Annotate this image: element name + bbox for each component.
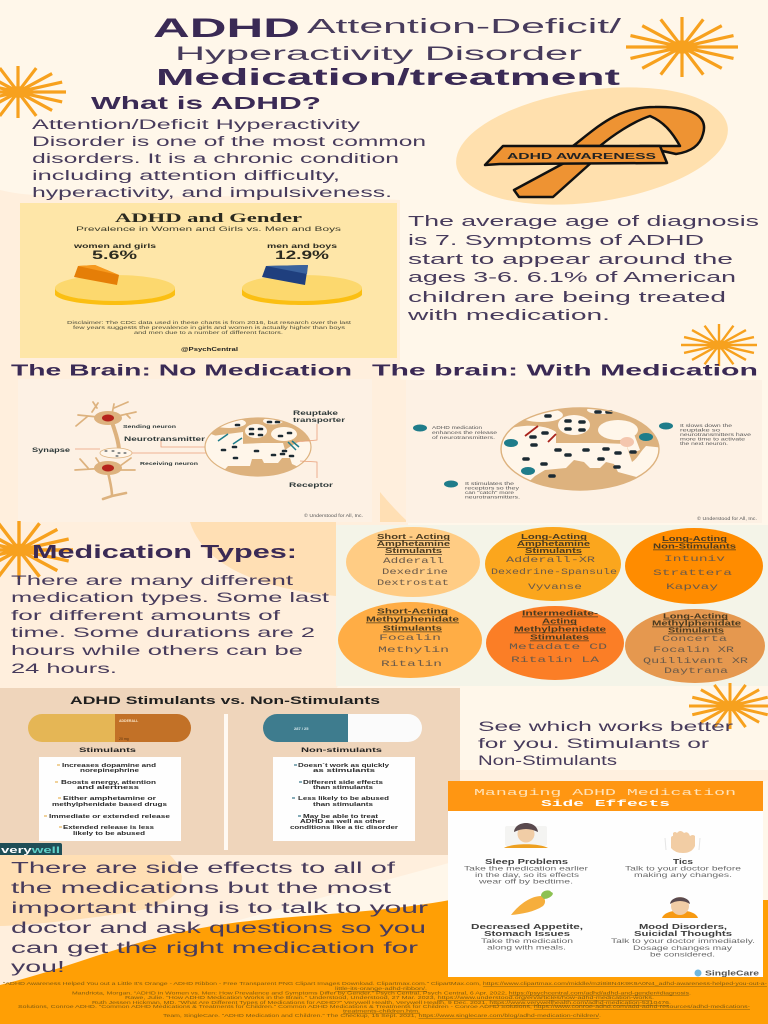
step 2 xyxy=(444,467,535,500)
circle: long-acting methylphenidate: Focalin XR xyxy=(653,645,734,655)
side effect: mood disorders: Suicidal Thoughts xyxy=(634,929,732,938)
circle: long-acting methylphenidate: Stimulants xyxy=(668,626,724,634)
title: ADHD xyxy=(153,13,300,43)
side effect: mood disorders xyxy=(611,897,755,958)
text block: closing message: important thing is to talk to your xyxy=(11,900,428,917)
neuron diagram xyxy=(75,402,136,499)
circle: long-acting methylphenidate: Concerta xyxy=(662,634,727,644)
icon: sunburst right lower xyxy=(689,683,768,729)
list: non-stimulants: than stimulants xyxy=(313,802,373,808)
title xyxy=(153,13,622,90)
circle: short-acting amphetamine: Amphetamine xyxy=(377,539,450,548)
step 1: enhances the release xyxy=(432,430,498,435)
list: stimulants xyxy=(39,747,181,841)
list: non-stimulants: Different side effects xyxy=(303,780,383,786)
side effect: mood disorders: be considered. xyxy=(650,952,715,958)
ribbon label: ADHD AWARENESS xyxy=(507,152,657,161)
side effect: sleep problems: Sleep Problems xyxy=(485,857,568,866)
circle: long-acting non-stimulants: Long-Acting xyxy=(662,534,727,543)
heading: medication types: Medication Types: xyxy=(32,541,297,562)
icon: sunburst right middle xyxy=(681,324,757,366)
citations: Team, SingleCare. “ADHD Medication and Children.” The Checkup, 15 Sept. 2021, https://www.singlecare.com/blog/adhd-medication-children/ . xyxy=(163,1013,601,1018)
text block: see which works better: Non-Stimulants xyxy=(478,753,617,768)
citations: Solutions, Conroe ADHD. “Common ADHD Medications & Treatments for Children.” Common ADHD Medications & Treatments for Children - Conroe ADHD Solutions, https://www.conroe-adhd.com/add-adhd-resources/adhd-medications- xyxy=(18,1004,751,1009)
heading: brain with medication: The brain: With Medication xyxy=(372,362,758,380)
panel: brain with medication: © Understood for All, Inc. xyxy=(697,516,757,521)
panel: ADHD and gender chart: few years suggests the prevalence in girls and women is actually higher than boys xyxy=(73,325,346,330)
panel: managing side effects: Side Effects xyxy=(541,799,670,809)
text block: see which works better: See which works better xyxy=(478,719,734,734)
circle: short-acting methylphenidate: Methylin xyxy=(378,645,449,655)
side effect: appetite: along with meals. xyxy=(487,944,566,952)
panel: brain without medication: Sending neuron xyxy=(123,424,176,429)
panel: brain with medication xyxy=(406,407,756,522)
text block: average age: with medication. xyxy=(406,307,610,324)
circle: long-acting non-stimulants: Non-Stimulants xyxy=(653,542,736,550)
circle: intermediate-acting methylphenidate xyxy=(486,606,624,680)
circle: long-acting amphetamine: Amphetamine xyxy=(517,539,590,548)
text block: medication types: There are many different xyxy=(11,572,293,588)
circle: long-acting non-stimulants xyxy=(625,528,763,604)
list: non-stimulants xyxy=(273,747,415,841)
circle: short-acting amphetamine: Stimulants xyxy=(385,546,442,555)
citations: Ruth Jessen Hickman, MD. “What Are Different Types of Medications for ADHD?” Verywell Health, Verywell Health, 9 Dec. 2021, https://www.verywellhealth.com/adhd-medication-5210476 . xyxy=(92,1000,671,1005)
logo: SingleCare xyxy=(694,970,759,978)
text block: medication types: for different amounts of xyxy=(11,607,280,623)
icon: stimulant capsule: ADDERALL xyxy=(119,719,139,723)
heading: What is ADHD: What is ADHD? xyxy=(91,93,321,113)
panel: brain without medication: Receptor xyxy=(289,483,334,489)
list: stimulants: Stimulants xyxy=(79,747,137,754)
step 3: more time to activate xyxy=(680,436,746,442)
side effect: sleep problems: in the day, so its effects xyxy=(475,872,579,879)
step 3 xyxy=(639,422,752,446)
step 1: of neurotransmitters. xyxy=(432,435,495,440)
text block: definition: Attention/Deficit Hyperactivity xyxy=(32,117,360,132)
icon: non-stimulant capsule: 287 / 25 xyxy=(294,726,309,731)
text block: medication types: 24 hours. xyxy=(11,660,117,676)
circle: long-acting amphetamine: Vyvanse xyxy=(528,582,582,592)
list: non-stimulants: as stimulants xyxy=(313,768,375,774)
side effect: sleep problems: Take the medication earlier xyxy=(464,866,588,872)
side effect: mood disorders: Talk to your doctor immediately. xyxy=(611,938,755,945)
citations: treatments-children.htm. xyxy=(343,1008,420,1014)
circle: short-acting amphetamine: Dextrostat xyxy=(377,578,449,588)
icon: sunburst left middle xyxy=(0,521,73,579)
list: stimulants: Increases dopamine and xyxy=(62,763,156,769)
circle: short-acting methylphenidate xyxy=(338,602,482,678)
panel: brain without medication: Synapse xyxy=(32,448,71,454)
circle: intermediate-acting methylphenidate: Ritalin LA xyxy=(511,655,601,665)
panel: medication type circles xyxy=(336,525,768,686)
circle: intermediate-acting methylphenidate: Methylphenidate xyxy=(514,624,606,634)
circle: intermediate-acting methylphenidate: Intermediate- xyxy=(522,608,599,618)
list: non-stimulants: Non-stimulants xyxy=(301,747,383,754)
list: stimulants: Boosts energy, attention xyxy=(61,780,156,786)
title: Hyperactivity Disorder xyxy=(175,44,583,65)
step 1: ADHD medication xyxy=(432,425,483,430)
list: stimulants: likely to be abused xyxy=(73,831,145,837)
side effect: tics: Talk to your doctor before xyxy=(625,866,742,872)
panel: ADHD and gender chart: ADHD and Gender xyxy=(115,211,303,225)
step 3: reuptake so xyxy=(680,428,721,432)
step 2: receptors so they xyxy=(465,486,520,490)
circle: short-acting amphetamine: Dexedrine xyxy=(382,567,448,577)
circle: short-acting methylphenidate: Methylphenidate xyxy=(366,614,459,624)
panel: brain without medication xyxy=(32,401,362,518)
logo: verywell xyxy=(0,843,62,855)
circle: long-acting amphetamine: Long-Acting xyxy=(521,532,587,541)
side effect: mood disorders: Mood Disorders, xyxy=(639,922,727,931)
list: stimulants: Immediate or extended release xyxy=(49,814,170,820)
circle: long-acting non-stimulants: Intuniv xyxy=(664,554,725,564)
list: non-stimulants: ADHD as well as other xyxy=(300,819,385,825)
side effect: appetite: Decreased Appetite, xyxy=(471,922,583,931)
heading: brain no medication: The Brain: No Medication xyxy=(11,362,352,380)
circle: long-acting amphetamine: Stimulants xyxy=(525,546,582,555)
list: stimulants: Extended release is less xyxy=(63,825,154,831)
text block: closing message xyxy=(11,860,428,976)
side effect: sleep problems: wear off by bedtime. xyxy=(477,878,573,886)
text block: closing message: doctor and ask questions so you xyxy=(11,920,426,937)
circle: short-acting amphetamine: Short - Acting xyxy=(377,532,450,541)
citations: Rawe, Julie. “How ADHD Medication Works in the Brain.” Understood, Understood, 27 Mar. 2023, https://www.understood.org/en/articles/how-adhd-medication-works . xyxy=(125,995,654,1000)
text block: average age: The average age of diagnosis xyxy=(408,213,759,230)
title: Attention-Deficit/ xyxy=(307,16,622,38)
circle: intermediate-acting methylphenidate: Metadate CD xyxy=(509,642,607,652)
text block: definition: hyperactivity, and impulsiveness. xyxy=(32,185,392,200)
title: Medication/treatment xyxy=(156,64,621,90)
panel: ADHD and gender chart: and men due to a number of different factors. xyxy=(134,330,283,335)
text block: average age: children are being treated xyxy=(408,289,726,306)
circle: short-acting amphetamine xyxy=(346,527,480,597)
list: non-stimulants: May be able to treat xyxy=(303,814,378,820)
circle: long-acting methylphenidate xyxy=(625,609,765,683)
text block: definition: disorders. It is a chronic condition xyxy=(32,151,399,166)
citations: Mandriota, Morgan. “ADHD in Women vs. Men: How Prevalence and Symptoms Differ by Gender.” Psych Central, Psych Central, 6 Apr. 2022, https://psychcentral.com/adhd/adhd-and-gender#diagnosis . xyxy=(72,990,691,996)
pie chart: men and boys xyxy=(242,265,362,305)
panel: ADHD and gender chart: 5.6% xyxy=(92,248,138,262)
text block: medication types: medication types. Some last xyxy=(11,589,329,605)
circle: short-acting amphetamine: Adderall xyxy=(383,556,444,566)
citations xyxy=(3,981,768,1018)
pie chart: women and girls xyxy=(55,265,175,305)
panel: brain without medication: Neurotransmitter xyxy=(124,437,206,443)
panel: ADHD and gender chart: men and boys xyxy=(267,244,338,250)
text block: definition: Disorder is one of the most common xyxy=(32,134,426,149)
circle: intermediate-acting methylphenidate: Acting xyxy=(542,616,577,626)
text block: closing message: the medications but the most xyxy=(11,880,392,897)
panel: ADHD and gender chart: women and girls xyxy=(72,244,157,250)
side effect: tics xyxy=(625,831,742,879)
list: stimulants: methylphenidate based drugs xyxy=(52,802,167,808)
list: stimulants: norepinephrine xyxy=(80,768,139,774)
circle: long-acting non-stimulants: Strattera xyxy=(653,568,732,578)
list: non-stimulants: Less likely to be abused xyxy=(298,796,389,802)
side effect: sleep problems xyxy=(464,823,588,886)
step 2: neurotransmitters. xyxy=(465,494,520,500)
step 3: neurotransmitters have xyxy=(680,432,752,437)
panel: managing side effects xyxy=(448,781,763,978)
list: non-stimulants: Doesn´t work as quickly xyxy=(298,763,389,769)
text block: average age: ages 3-6. 6.1% of American xyxy=(408,269,736,286)
panel: stimulants vs non-stimulants: ADHD Stimulants vs. Non-Stimulants xyxy=(70,695,380,707)
icon: awareness ribbon xyxy=(449,71,735,221)
text block: medication types: hours while others can be xyxy=(11,642,303,658)
step 3: It slows down the xyxy=(680,423,733,428)
list: non-stimulants: conditions like a tic disorder xyxy=(290,825,398,831)
side effect: tics: making any changes. xyxy=(634,872,732,879)
list: non-stimulants: than stimulants xyxy=(313,785,373,791)
logo: SingleCare: SingleCare xyxy=(705,970,759,978)
panel: ADHD and gender chart: @PsychCentral xyxy=(181,347,239,353)
panel: ADHD and gender chart: Prevalence in Women and Girls vs. Men and Boys xyxy=(76,226,342,233)
text block: average age: start to appear around the xyxy=(408,251,733,268)
text block: average age: is 7. Symptoms of ADHD xyxy=(408,232,704,249)
text block: medication types: time. Some durations are 2 xyxy=(11,624,315,640)
circle: long-acting non-stimulants: Kapvay xyxy=(666,582,718,592)
circle: long-acting amphetamine: Adderall-XR xyxy=(506,555,595,565)
circle: short-acting methylphenidate: Ritalin xyxy=(381,659,442,669)
panel: brain without medication: transporter xyxy=(293,418,346,424)
circle: short-acting methylphenidate: Focalin xyxy=(379,633,441,643)
panel: ADHD and gender chart: Disclaimer: The CDC data used in these charts is from 2016, but research over the last xyxy=(67,320,352,325)
side effect: appetite: Take the medication xyxy=(481,938,574,945)
text block: definition xyxy=(32,117,426,200)
circle: long-acting methylphenidate: Long-Acting xyxy=(663,612,728,620)
citations: “ADHD Awareness Helped You out a Little It's Orange - ADHD Ribbon - Free Transparent PNG Clipart Images Download. Clipartmax.com.” ClipartMax.com, https://www.clipartmax.com/middle/m2i8i8N4K9K9A0N4_adhd-awareness-helped-you-out-a- xyxy=(3,981,768,986)
icon: sunburst top right xyxy=(626,17,738,77)
circle: long-acting methylphenidate: Methylphenidate xyxy=(652,618,741,628)
circle: intermediate-acting methylphenidate: Stimulates xyxy=(530,632,589,642)
step 2: can "catch" more xyxy=(465,490,515,495)
text block: definition: including attention difficulty, xyxy=(32,168,340,183)
step 1 xyxy=(413,424,518,447)
panel: ADHD and gender chart: 12.9% xyxy=(275,248,330,262)
side effect: tics: Tics xyxy=(673,857,693,866)
list: stimulants: Either amphetamine or xyxy=(63,796,156,802)
circle: long-acting methylphenidate: Quillivant XR xyxy=(643,656,748,666)
step 3: the next neuron. xyxy=(680,441,728,446)
citations: little-its-orange-adhd-ribbon/. xyxy=(335,986,427,991)
logo: verywell: very well xyxy=(1,845,60,855)
panel: stimulants vs non-stimulants xyxy=(0,688,460,855)
step 2: It stimulates the xyxy=(465,481,515,486)
icon: stimulant capsule xyxy=(28,714,191,742)
text block: average age xyxy=(406,213,759,324)
synapse close-up xyxy=(204,417,312,477)
text block: closing message: can get the right medication for xyxy=(11,940,418,957)
circle: short-acting methylphenidate: Stimulants xyxy=(383,624,442,632)
panel: ADHD and gender chart xyxy=(20,203,397,358)
list: stimulants: and alertness xyxy=(77,785,139,791)
synapse close-up with medication xyxy=(500,407,660,491)
text block: see which works better: for you. Stimulants or xyxy=(478,736,710,751)
side effect: appetite: Stomach Issues xyxy=(484,929,570,938)
text block: closing message: There are side effects to all of xyxy=(11,860,396,877)
icon: stimulant capsule: 20 mg xyxy=(119,737,129,741)
circle: long-acting methylphenidate: Daytrana xyxy=(664,666,728,676)
text block: medication types xyxy=(11,572,329,676)
circle: long-acting amphetamine: Dexedrine-Spansule xyxy=(491,567,617,577)
circle: short-acting methylphenidate: Short-Acting xyxy=(377,606,448,616)
icon: sunburst upper left xyxy=(0,66,66,118)
panel: managing side effects: Managing ADHD Medication xyxy=(474,788,736,798)
panel: brain without medication: Reuptake xyxy=(293,411,339,417)
panel: brain without medication: Receiving neuron xyxy=(140,461,198,466)
side effect: mood disorders: Dosage changes may xyxy=(633,945,733,952)
text block: see which works better xyxy=(478,719,734,768)
text block: closing message: you! xyxy=(11,959,65,976)
icon: non-stimulant capsule xyxy=(263,714,422,742)
panel: brain without medication: © Understood for All, Inc. xyxy=(304,513,363,518)
circle: long-acting amphetamine xyxy=(485,527,621,601)
side effect: appetite xyxy=(471,890,583,952)
